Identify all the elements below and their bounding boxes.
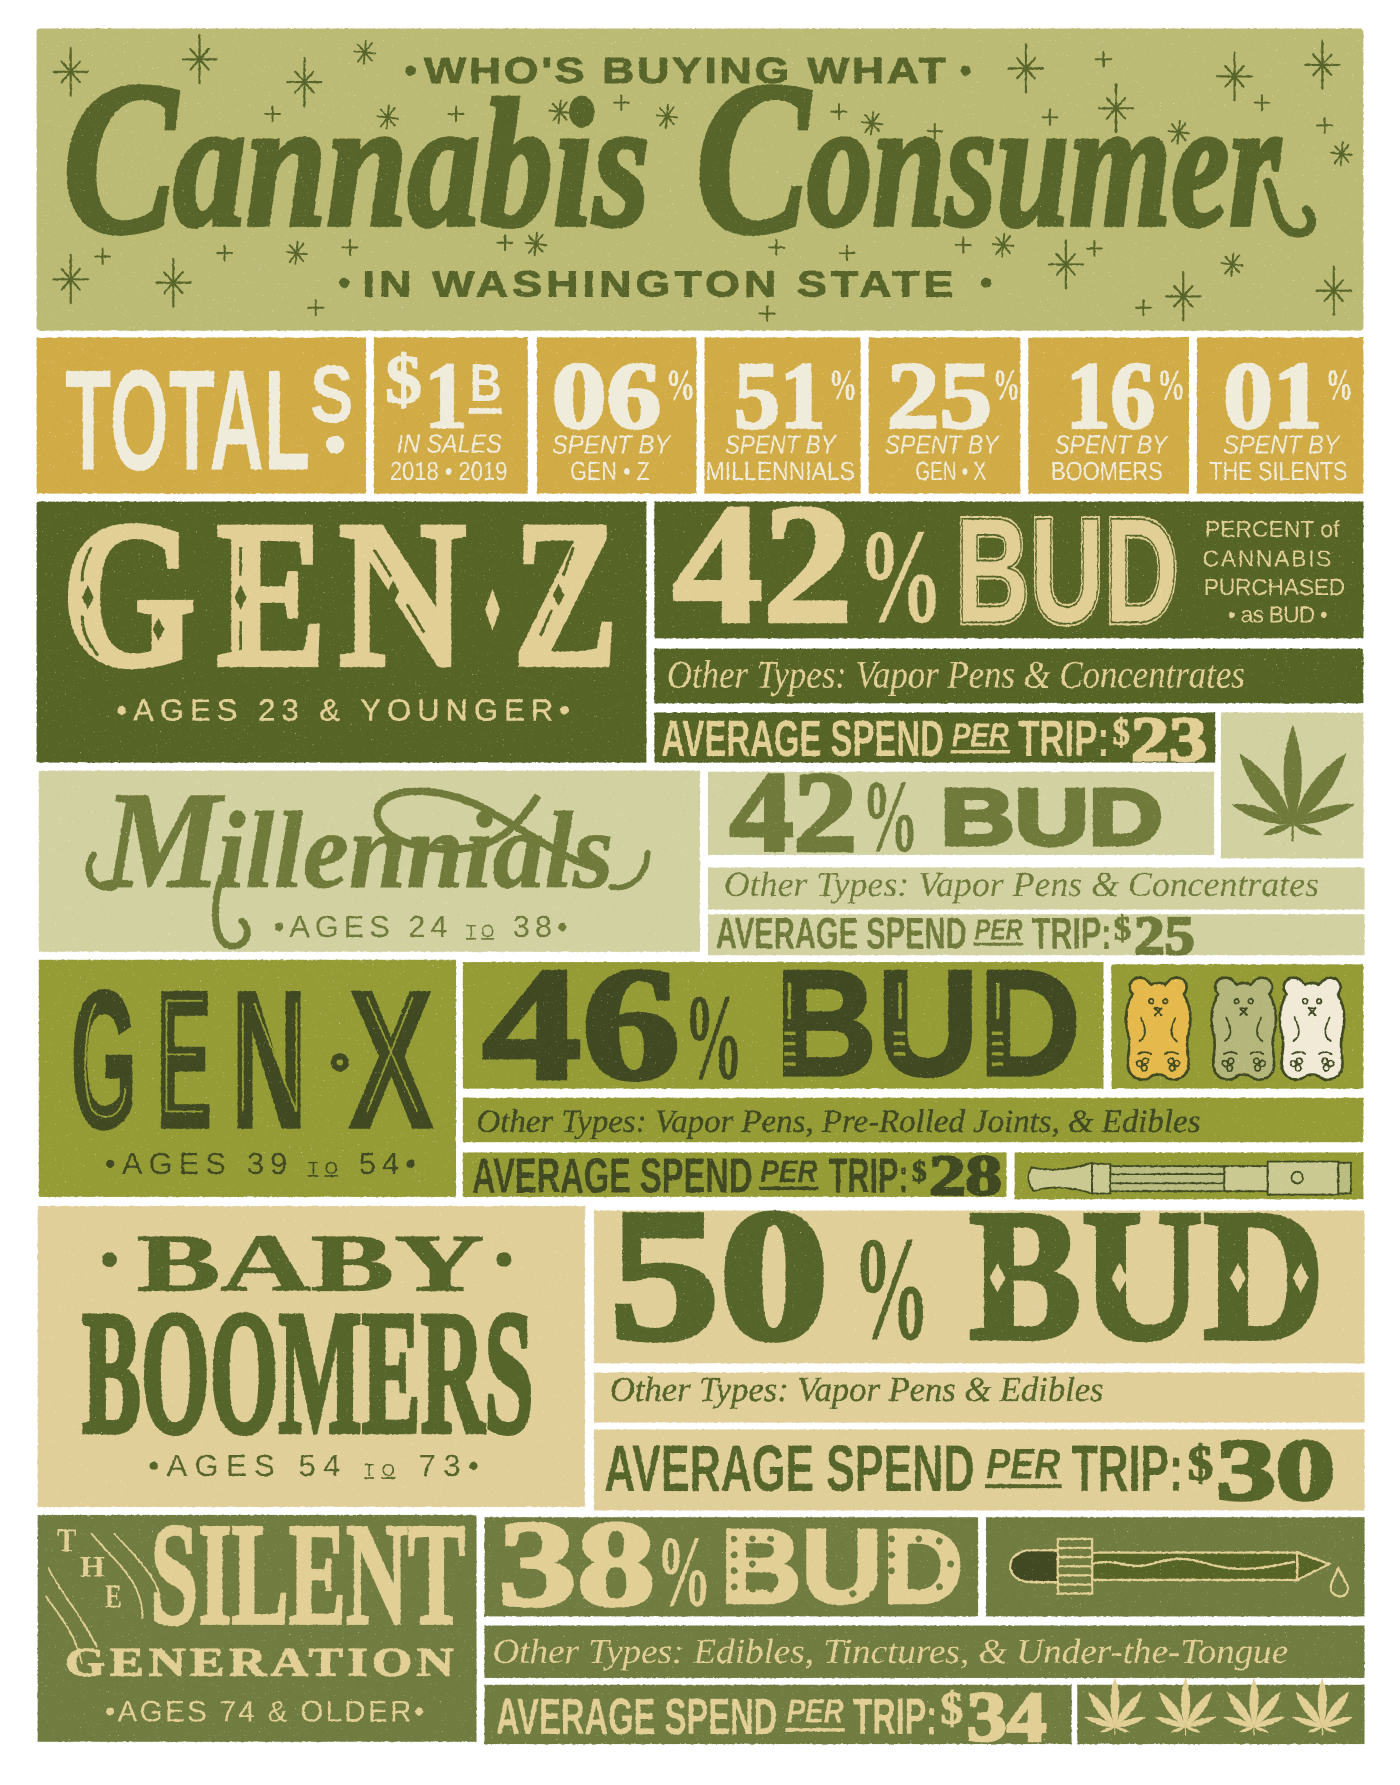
stat: 06% Gen Z: GEN • Z <box>570 456 650 486</box>
heading: Gen Z <box>62 479 618 711</box>
stat: 16% Boomers: SPENT BY <box>1054 430 1170 460</box>
text: percent of cannabis purchased as bud: PURCHASED <box>1204 574 1345 600</box>
stat: 06% Gen Z: SPENT BY <box>552 430 673 460</box>
stat: 51% Millennials: MILLENNIALS <box>706 456 855 486</box>
stat: 50% bud: % <box>853 1207 930 1371</box>
stat: 16% Boomers <box>1051 342 1186 486</box>
text: ages 23 and younger: •AGES 23 & YOUNGER• <box>116 692 570 727</box>
stat: $1B in sales: 2018 • 2019 <box>390 456 507 486</box>
stat: 01% the Silents <box>1209 342 1353 486</box>
stat: 42% bud: BUD <box>955 486 1179 654</box>
heading: the Silent Generation: GENERATION <box>65 1640 458 1685</box>
text: average spend per trip $25: PER <box>975 914 1023 946</box>
text: other types: Other Types: Edibles, Tinctures, & Under-the-Tongue <box>492 1632 1288 1671</box>
heading: Baby Boomers <box>82 1217 534 1471</box>
text: ages 39 to 54: •AGES 39 TO 54• <box>105 1146 416 1181</box>
text: average spend per trip $23: 23 <box>1131 703 1207 774</box>
text: other types: Other Types: Vapor Pens & Edibles <box>610 1370 1103 1409</box>
text: average spend per trip $23: AVERAGE SPEND <box>661 710 944 767</box>
stat: 42% bud <box>730 748 1163 875</box>
stat: 50% bud: BUD <box>969 1170 1325 1379</box>
heading: the Silent Generation: E <box>105 1578 122 1615</box>
icon: four cannabis leaves <box>1083 1677 1354 1736</box>
stat: 25% Gen X: SPENT BY <box>885 430 1001 460</box>
text: average spend per trip $34: TRIP: <box>853 1688 937 1745</box>
text: average spend per trip $30: $ <box>1188 1435 1213 1491</box>
text: percent of cannabis purchased as bud <box>1203 516 1345 627</box>
stat: $1B in sales: IN SALES <box>397 429 502 459</box>
text: average spend per trip $25: 25 <box>1134 905 1195 966</box>
title: Cannabis Consumer: C <box>695 37 812 279</box>
panel: Baby Boomers <box>38 1170 1365 1518</box>
icon: star field <box>54 35 1352 321</box>
stat: $1B in sales: $ <box>385 341 422 417</box>
heading: Gen X <box>71 950 433 1169</box>
stat: 25% Gen X: % <box>993 361 1020 409</box>
stat: 16% Boomers: % <box>1157 361 1186 409</box>
text: average spend per trip $23: TRIP: <box>1018 710 1109 767</box>
heading: Millennials <box>89 764 648 946</box>
stat: 01% the Silents: SPENT BY <box>1223 430 1342 460</box>
heading: Gen X: X <box>349 950 433 1169</box>
stat: $1B in sales <box>385 341 507 486</box>
heading: Gen Z: E <box>217 479 326 711</box>
text: average spend per trip $34: PER <box>787 1693 844 1730</box>
heading: Gen X: E <box>156 950 212 1169</box>
text: percent of cannabis purchased as bud: • as BUD • <box>1228 601 1328 627</box>
panel: Gen X <box>39 935 1363 1208</box>
text: average spend per trip $25: $ <box>1114 910 1131 947</box>
heading: totals: S <box>310 349 353 440</box>
stat: 51% Millennials: % <box>829 361 857 409</box>
heading: totals: TOTAL <box>65 341 310 501</box>
text: average spend per trip $30: PER <box>986 1440 1061 1487</box>
text: other types: Other Types: Vapor Pens, Pre-Rolled Joints, & Edibles <box>477 1104 1200 1140</box>
text: average spend per trip $28: PER <box>760 1153 817 1189</box>
heading: Millennials: illennials <box>217 789 613 911</box>
panel: Gen Z <box>37 469 1363 774</box>
stat: 06% Gen Z: 06 <box>552 342 661 448</box>
text: other types: Other Types: Vapor Pens & Concentrates <box>724 865 1319 904</box>
stat: 38% bud: % <box>657 1516 711 1627</box>
panel: totals row <box>37 337 1363 501</box>
text: average spend per trip $30: AVERAGE SPEND <box>604 1432 975 1506</box>
panel: leaf <box>1221 712 1363 858</box>
title: Cannabis Consumer: C <box>63 37 179 279</box>
heading: Gen X: N <box>231 950 307 1169</box>
panel: header <box>37 28 1363 331</box>
heading: Gen Z: N <box>339 479 466 711</box>
text: average spend per trip $28 <box>472 1145 1002 1208</box>
text: average spend per trip $28: 28 <box>929 1145 1002 1208</box>
text: average spend per trip $25: AVERAGE SPEND <box>716 909 967 958</box>
stat: 42% bud: % <box>857 502 944 651</box>
text: average spend per trip $30: 30 <box>1216 1422 1335 1518</box>
stat: 51% Millennials: 51 <box>734 342 825 448</box>
stat: 16% Boomers: BOOMERS <box>1051 456 1163 486</box>
text: average spend per trip $34: $ <box>940 1683 963 1734</box>
heading: Gen Z: G <box>62 479 196 711</box>
panel: Silent Generation <box>38 1493 1365 1757</box>
stat: 42% bud: 42 <box>730 748 857 875</box>
stat: 42% bud: BUD <box>940 773 1163 862</box>
text: percent of cannabis purchased as bud: CANNABIS <box>1203 546 1331 572</box>
stat: 42% bud <box>673 469 1179 658</box>
icon: tincture dropper <box>1010 1539 1348 1596</box>
text: average spend per trip $34 <box>496 1679 1046 1757</box>
text: percent of cannabis purchased as bud: PERCENT of <box>1205 516 1340 542</box>
subheading: in Washington state: IN WASHINGTON STATE <box>363 263 958 304</box>
stat: 42% bud: 42 <box>673 469 853 658</box>
heading: Gen Z: Z <box>513 479 618 711</box>
icon: cannabis leaf <box>1229 725 1356 841</box>
panel: Millennials <box>39 748 1365 966</box>
stat: 42% bud: BUD <box>955 486 1179 654</box>
stat: 50% bud: 50 <box>610 1170 829 1379</box>
text: average spend per trip $23: PER <box>952 718 1009 755</box>
heading: the Silent Generation <box>46 1493 465 1685</box>
heading: the Silent Generation: SILENT <box>151 1493 465 1655</box>
heading: who's buying what: WHO'S BUYING WHAT <box>424 50 948 91</box>
text: average spend per trip $34: 34 <box>967 1679 1046 1757</box>
stat: 46% bud: BUD <box>775 939 1081 1107</box>
stat: 42% bud: % <box>862 760 919 873</box>
stat: 46% bud <box>482 935 1081 1114</box>
stat: 38% bud <box>498 1495 963 1632</box>
text: average spend per trip $28: AVERAGE SPEND <box>472 1149 752 1203</box>
stat: 16% Boomers: 16 <box>1066 342 1155 448</box>
title: Cannabis Consumer: annabis <box>173 63 650 265</box>
text: average spend per trip $23 <box>661 703 1207 774</box>
text: average spend per trip $25 <box>716 905 1195 966</box>
text: average spend per trip $25: TRIP: <box>1032 909 1111 958</box>
text: average spend per trip $28: TRIP: <box>829 1149 909 1203</box>
text: ages 74 and older: •AGES 74 & OLDER• <box>105 1695 424 1728</box>
stat: 25% Gen X <box>885 342 1020 486</box>
stat: 01% the Silents: THE SILENTS <box>1209 456 1347 486</box>
stat: 46% bud: 46 <box>482 935 681 1114</box>
text: average spend per trip $34: AVERAGE SPEND <box>496 1688 777 1745</box>
heading: Baby Boomers: BABY <box>137 1217 485 1308</box>
panel: Baby Boomers: BOOMERS <box>82 1276 534 1471</box>
stat: 50% bud <box>610 1170 1325 1379</box>
stat: $1B in sales: B <box>470 355 502 413</box>
stat: 46% bud: % <box>684 968 743 1105</box>
stat: 25% Gen X: GEN • X <box>915 456 986 486</box>
icon: vape pen <box>1028 1162 1351 1195</box>
stat: 06% Gen Z: % <box>666 361 695 409</box>
heading: the Silent Generation: H <box>80 1551 105 1583</box>
heading: Millennials: M <box>101 764 225 918</box>
text: average spend per trip $23: $ <box>1113 712 1130 752</box>
stat: 51% Millennials <box>706 342 857 486</box>
stat: 06% Gen Z <box>552 342 695 486</box>
heading: the Silent Generation: T <box>57 1522 77 1559</box>
stat: 01% the Silents: 01 <box>1223 342 1322 448</box>
text: average spend per trip $28: $ <box>912 1156 927 1188</box>
text: ages 54 to 73: •AGES 54 TO 73• <box>148 1448 479 1483</box>
stat: $1B in sales: 1 <box>424 342 467 448</box>
stat: 51% Millennials: SPENT BY <box>725 430 838 460</box>
stat: 38% bud: BUD <box>720 1509 963 1626</box>
heading: Gen X: G <box>71 950 137 1169</box>
text: average spend per trip $30 <box>604 1422 1335 1518</box>
icon: gummy bears <box>1126 978 1344 1080</box>
text: ages 24 to 38: •AGES 24 TO 38• <box>274 909 568 944</box>
title: Cannabis Consumer <box>63 37 1311 279</box>
text: average spend per trip $30: TRIP: <box>1072 1432 1183 1506</box>
text: other types: Other Types: Vapor Pens & Concentrates <box>667 653 1245 696</box>
stat: 25% Gen X: 25 <box>887 342 992 448</box>
heading: totals <box>65 341 353 501</box>
stat: 38% bud: 38 <box>498 1495 656 1632</box>
stat: 01% the Silents: % <box>1326 361 1353 409</box>
